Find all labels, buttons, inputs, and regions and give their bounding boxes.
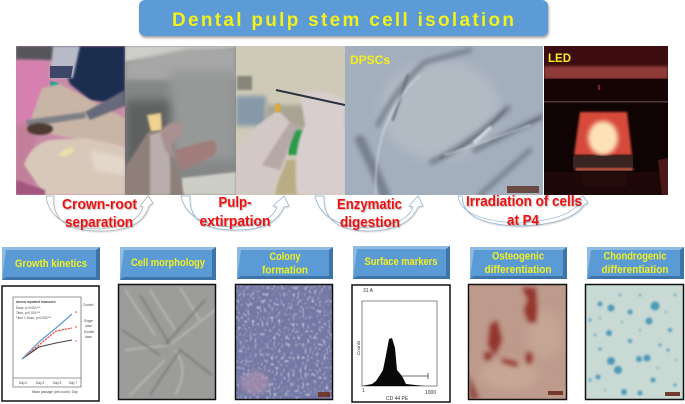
header: surface markers	[353, 246, 450, 279]
photo: enzymatic digestion	[236, 46, 345, 195]
step label: irradiation of cells: Irradiation of cells	[466, 193, 582, 210]
panel: chondrogenic micrograph	[586, 284, 684, 400]
header: colony formation: formation	[262, 264, 308, 276]
header: colony formation: Colony	[270, 251, 301, 263]
marker gate	[401, 373, 428, 379]
label: LED: LED	[548, 53, 571, 65]
axis text: 1000	[425, 390, 436, 396]
chart legend: Single	[84, 319, 93, 323]
photo: crown-root separation	[16, 46, 125, 195]
axis labels: Day 7	[69, 381, 78, 385]
step label: irradiation of cells: at P4	[507, 212, 540, 229]
step label: pulp extirpation: Pulp-	[218, 194, 252, 211]
axis text: CD 44 PE	[386, 396, 409, 402]
header: osteogenic differentiation	[470, 247, 567, 279]
axis labels: Mean passage (cell count) / Day	[32, 390, 78, 394]
chart legend: Double	[84, 330, 94, 334]
panel: colony formation micrograph	[236, 284, 332, 400]
significance marks: c	[75, 338, 77, 343]
chart legend: Control	[83, 303, 94, 307]
header: chondrogenic differentiation: Chondrogenic	[604, 250, 666, 262]
step label: crown-root separation: Crown-root	[62, 196, 137, 213]
label: DPSCs: DPSCs	[350, 53, 390, 67]
header: cell morphology: Cell morphology	[131, 257, 206, 269]
chart legend: dose	[85, 324, 92, 328]
panel: surface markers histogram	[352, 285, 450, 402]
axis text: 1	[362, 388, 365, 394]
arrow: irradiation	[458, 196, 588, 226]
legend: stats: Dose, p<0.001***	[16, 306, 41, 310]
header: cell morphology	[120, 247, 216, 280]
axis labels: Day 5	[53, 381, 62, 385]
header: chondrogenic differentiation	[587, 247, 684, 279]
header: colony formation	[237, 247, 333, 279]
step label: crown-root separation: separation	[65, 214, 133, 231]
title banner	[139, 0, 548, 36]
header: chondrogenic differentiation: differentiation	[602, 264, 669, 276]
photo: LED irradiation	[544, 46, 668, 195]
axis text: 31 A	[363, 288, 374, 294]
arrow: pulp extirpation	[181, 196, 289, 230]
panel: growth kinetics chart	[2, 286, 99, 401]
header: osteogenic differentiation: differentiation	[484, 264, 552, 276]
legend: stats: Time × Dose, p<0.001***	[16, 316, 52, 320]
step label: enzymatic digestion: digestion	[340, 214, 400, 231]
panel: cell morphology micrograph	[118, 284, 216, 400]
y-axis label: Counts	[356, 340, 361, 355]
arrow: enzymatic digestion	[315, 196, 423, 231]
axis labels: Day 3	[36, 381, 45, 385]
step label: enzymatic digestion	[337, 196, 402, 231]
header: surface markers: Surface markers	[364, 256, 438, 268]
significance marks: a	[75, 309, 78, 314]
header: growth kinetics: Growth kinetics	[15, 258, 87, 270]
panel: osteogenic micrograph	[468, 284, 566, 400]
step label: pulp extirpation	[200, 194, 270, 230]
line: single dose	[22, 328, 72, 359]
header: growth kinetics	[2, 247, 100, 280]
line: double dose	[22, 314, 72, 359]
axis labels: Day 0	[19, 381, 28, 385]
histogram	[362, 338, 425, 386]
axes	[362, 301, 437, 386]
legend: stats: Time, p<0.001***	[16, 311, 41, 315]
chart frame	[13, 297, 81, 387]
step label: enzymatic digestion: Enzymatic	[337, 196, 402, 213]
legend: stats: Anova repeated measures	[16, 300, 56, 304]
photo: DPSCs micrograph	[345, 46, 543, 195]
step label: crown-root separation	[62, 196, 137, 231]
header: osteogenic differentiation: Osteogenic	[492, 250, 544, 262]
step label: pulp extirpation: extirpation	[200, 213, 270, 230]
step label: irradiation of cells	[466, 193, 582, 229]
title banner: Dental pulp stem cell isolation	[172, 10, 514, 31]
significance marks: b	[75, 324, 78, 329]
arrow: crown-root separation	[46, 196, 153, 231]
photo: pulp extirpation	[125, 46, 236, 195]
line: control	[22, 340, 72, 359]
chart legend: dose	[85, 335, 92, 339]
